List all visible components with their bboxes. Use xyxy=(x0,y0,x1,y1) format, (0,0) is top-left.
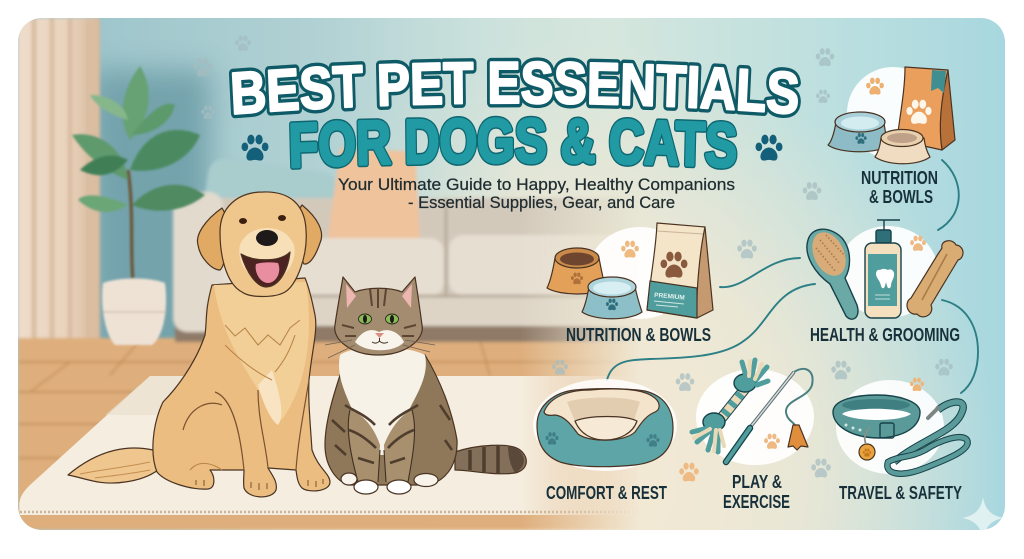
icon: premium food bag: PREMIUM xyxy=(654,292,685,302)
icon: feather wand xyxy=(726,369,813,462)
label: PLAY & xyxy=(732,472,782,492)
panel: nutrition and bowls (top right) xyxy=(828,67,955,207)
title xyxy=(228,57,837,170)
label: COMFORT & REST xyxy=(546,483,667,503)
illustration: golden retriever xyxy=(68,192,330,497)
heading: best pet essentials: BEST PET ESSENTIALS xyxy=(228,57,801,118)
label: HEALTH & GROOMING xyxy=(810,325,960,345)
icon: title paw left xyxy=(242,135,268,161)
subtitle: - Essential Supplies, Gear, and Care xyxy=(408,193,675,212)
icon: premium food bag xyxy=(647,223,713,318)
subtitle: Your Ultimate Guide to Happy, Healthy Companions xyxy=(338,175,735,194)
subtitle xyxy=(338,175,735,212)
panel: nutrition and bowls (centre) xyxy=(547,223,713,345)
icon: orange paw xyxy=(764,434,780,449)
panel: play and exercise xyxy=(692,360,814,512)
label: TRAVEL & SAFETY xyxy=(839,483,962,503)
label: NUTRITION & BOWLS xyxy=(566,325,711,345)
icon: blue bowl xyxy=(582,277,642,319)
label: NUTRITION xyxy=(861,168,938,188)
living room scene xyxy=(18,18,632,530)
panel: travel and safety xyxy=(833,378,968,503)
icon: orange paw xyxy=(910,378,924,391)
icon: sparkle xyxy=(962,497,1004,540)
panel: play and exercise: EXERCISE xyxy=(723,492,790,512)
icon: title paw right xyxy=(756,135,782,161)
icon: orange paw xyxy=(621,241,639,258)
icon: blue bowl xyxy=(828,112,890,152)
icon: collar xyxy=(833,395,920,460)
panel: nutrition and bowls (top right): & BOWLS xyxy=(869,187,933,207)
heading: best pet essentials: BEST PET ESSENTIALS xyxy=(232,60,798,115)
illustration: tabby cat xyxy=(325,277,526,494)
scattered paw prints xyxy=(193,36,953,477)
wall shade behind plant xyxy=(90,70,210,370)
icon: cream bowl xyxy=(875,130,930,164)
panel: health and grooming xyxy=(806,220,963,345)
heading: for dogs and cats: FOR DOGS & CATS xyxy=(289,116,738,170)
icon: leash xyxy=(887,402,968,474)
plant xyxy=(72,66,205,345)
icon: brush xyxy=(806,227,858,319)
icon: rope toy xyxy=(692,360,768,452)
icon: pet bed xyxy=(537,389,673,467)
icon: bone xyxy=(907,241,963,317)
panel: comfort and rest xyxy=(533,379,677,503)
icon: orange paw lower xyxy=(679,463,699,481)
wall xyxy=(98,18,474,198)
heading: for dogs and cats: FOR DOGS & CATS xyxy=(290,117,736,168)
rug xyxy=(19,376,614,515)
icon: orange bowl xyxy=(547,248,606,294)
icon: orange paw xyxy=(910,236,926,251)
icon: orange food bag xyxy=(897,67,955,150)
icon: orange paw xyxy=(866,78,884,95)
icon: shampoo bottle xyxy=(865,220,901,318)
connector lines xyxy=(607,160,978,393)
